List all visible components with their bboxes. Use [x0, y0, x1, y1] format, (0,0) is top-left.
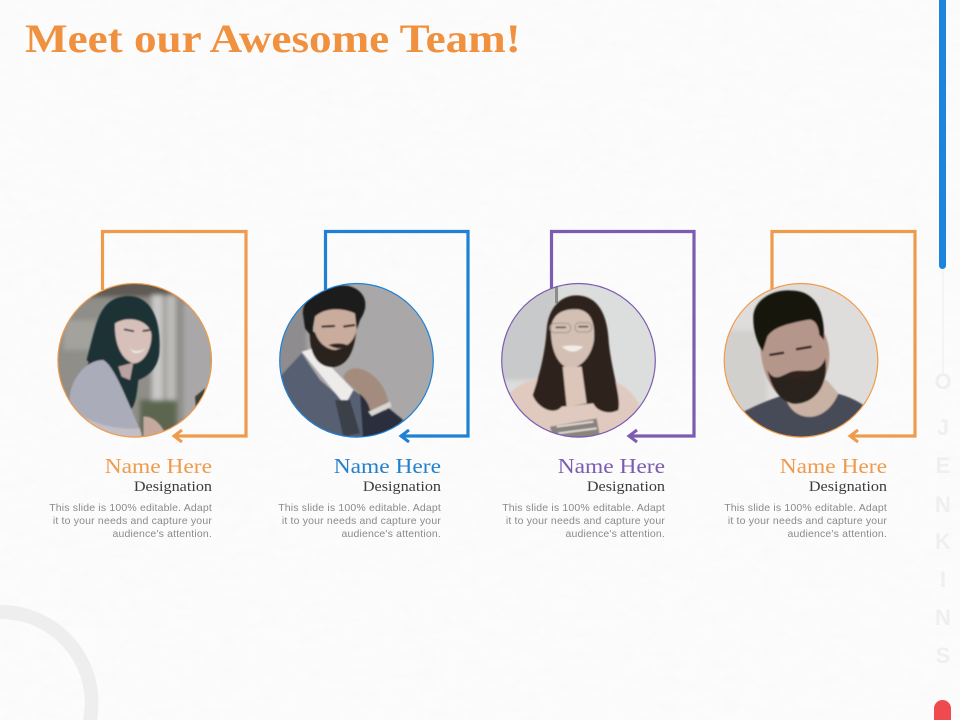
team member 3 text: Designation — [587, 479, 665, 495]
side lettering: J — [937, 415, 949, 440]
side progress bar — [939, 0, 946, 373]
team member 4 text: it to your needs and capture your — [728, 515, 887, 527]
team member 2 text: Name Here — [334, 454, 441, 478]
decorative ring bottom-left — [0, 605, 98, 720]
photo 3: smiling woman with glasses — [497, 280, 660, 443]
team member 2 text: audience's attention. — [341, 528, 441, 540]
side lettering: K — [935, 529, 951, 554]
team member 4 text: audience's attention. — [787, 528, 887, 540]
team member 4 text: This slide is 100% editable. Adapt — [724, 502, 887, 514]
frame arrow 4 — [772, 232, 915, 442]
red pill marker — [934, 700, 951, 720]
team member 3 text: This slide is 100% editable. Adapt — [502, 502, 665, 514]
title: Meet our Awesome Team! — [25, 16, 521, 61]
team member 2 text: it to your needs and capture your — [282, 515, 441, 527]
team member 3 text: Name Here — [558, 454, 665, 478]
team member 4 text: Designation — [809, 479, 887, 495]
team member 1 text: audience's attention. — [112, 528, 212, 540]
team member 3 text: audience's attention. — [565, 528, 665, 540]
photo 4: bearded man in grey tee — [720, 280, 883, 443]
side lettering — [934, 369, 952, 668]
frame arrow 3 — [552, 232, 694, 442]
team member 3 text: it to your needs and capture your — [506, 515, 665, 527]
team member 3 text — [502, 454, 665, 540]
team member 2 text — [278, 454, 441, 540]
photo 2: man in suit — [279, 282, 434, 438]
frame arrow 2 — [326, 232, 468, 442]
side lettering: E — [936, 453, 950, 478]
photo 1: woman with teal hair — [53, 280, 217, 443]
team member 2 text: This slide is 100% editable. Adapt — [278, 502, 441, 514]
team member 1 text: it to your needs and capture your — [53, 515, 212, 527]
side lettering: O — [934, 369, 952, 394]
team member 4 text: Name Here — [780, 454, 887, 478]
team member 1 text: Designation — [134, 479, 212, 495]
team member 1 text: Name Here — [105, 454, 212, 478]
side lettering: S — [936, 643, 950, 668]
frame arrow 1 — [102, 232, 246, 442]
team member 2 text: Designation — [363, 479, 441, 495]
team member 1 text: This slide is 100% editable. Adapt — [49, 502, 212, 514]
team member 1 text — [49, 454, 212, 540]
team member 4 text — [724, 454, 887, 540]
side lettering: N — [935, 605, 951, 630]
side lettering: I — [940, 567, 946, 592]
side lettering: N — [935, 492, 951, 517]
